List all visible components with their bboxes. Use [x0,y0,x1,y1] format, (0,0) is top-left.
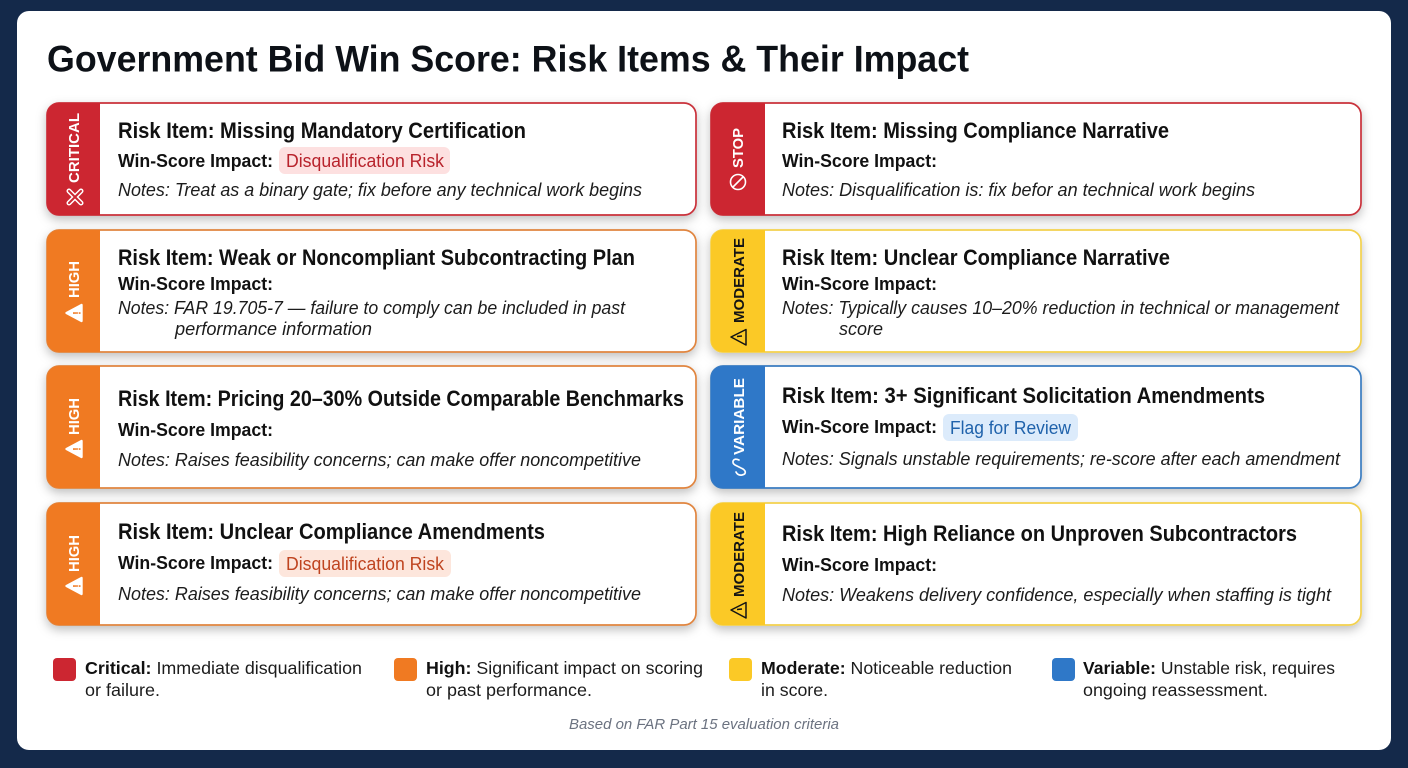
footnote: Based on FAR Part 15 evaluation criteria [569,717,839,733]
panel: moderate unclear compliance narrative [711,230,1361,352]
panel: moderate unproven subcontractors: Win-Score Impact: [782,555,937,575]
title: Government Bid Win Score: Risk Items & Their Impact [47,38,969,80]
panel: high unclear compliance amendments [47,503,696,625]
legend: moderate: Moderate: Noticeable reduction [761,658,1012,678]
panel: moderate unproven subcontractors: MODERATE [731,512,748,597]
panel: high pricing outside benchmarks [47,366,696,488]
panel: high unclear compliance amendments: Win-Score Impact: [118,553,273,573]
panel: high subcontracting plan [47,230,696,352]
panel: variable solicitation amendments [711,366,1361,488]
panel: stop missing compliance narrative [711,103,1361,215]
panel: moderate unproven subcontractors [711,503,1361,625]
legend: high: or past performance. [426,680,592,700]
panel: high pricing outside benchmarks: Risk Item: Pricing 20–30% Outside Comparable Benchmarks [118,386,684,411]
panel: high subcontracting plan: Win-Score Impact: [118,274,273,294]
panel: moderate unclear compliance narrative: MODERATE [731,238,748,323]
panel: variable solicitation amendments: Risk Item: 3+ Significant Solicitation Amendments [782,383,1265,408]
panel: high subcontracting plan: Notes: FAR 19.705-7 — failure to comply can be included in past [118,298,626,318]
legend: variable [1052,658,1335,700]
legend: high: High: Significant impact on scoring [426,658,703,678]
panel: variable solicitation amendments: Win-Score Impact: [782,417,937,437]
legend: moderate: in score. [761,680,828,700]
legend: moderate [729,658,1012,700]
panel: high unclear compliance amendments: ! [72,584,84,588]
panel: critical missing mandatory certification [47,103,696,215]
panel: critical missing mandatory certification: Risk Item: Missing Mandatory Certification [118,118,526,143]
panel: variable solicitation amendments: Notes: Signals unstable requirements; re-score after each amendment [782,449,1341,469]
panel: variable solicitation amendments: VARIABLE [731,378,748,455]
panel: moderate unproven subcontractors: Notes: Weakens delivery confidence, especially when staffing is tight [782,585,1332,605]
legend: variable: ongoing reassessment. [1083,680,1268,700]
panel: high pricing outside benchmarks: HIGH [66,398,83,435]
legend: high [394,658,703,700]
panel: high unclear compliance amendments: Disqualification Risk [286,554,445,574]
panel: stop missing compliance narrative: Win-Score Impact: [782,151,937,171]
panel: stop missing compliance narrative: STOP [730,128,747,168]
panel: high unclear compliance amendments: Risk Item: Unclear Compliance Amendments [118,519,545,544]
panel: high pricing outside benchmarks: ! [72,447,84,451]
panel: high pricing outside benchmarks: Notes: Raises feasibility concerns; can make offer noncompetitive [118,450,641,470]
panel: moderate unclear compliance narrative: Risk Item: Unclear Compliance Narrative [782,245,1170,270]
panel: high subcontracting plan: Risk Item: Weak or Noncompliant Subcontracting Plan [118,245,635,270]
panel: critical missing mandatory certification: Win-Score Impact: [118,151,273,171]
legend: critical: Critical: Immediate disqualification [85,658,362,678]
panel: variable solicitation amendments: Flag for Review [950,418,1072,438]
legend: variable: Variable: Unstable risk, requires [1083,658,1335,678]
panel: high pricing outside benchmarks: Win-Score Impact: [118,420,273,440]
legend: critical [53,658,362,700]
panel: critical missing mandatory certification: CRITICAL [66,113,83,183]
panel: moderate unclear compliance narrative: score [839,319,883,339]
panel: critical missing mandatory certification: Notes: Treat as a binary gate; fix before any technical work begins [118,180,642,200]
panel: high unclear compliance amendments: HIGH [66,535,83,572]
panel: high unclear compliance amendments: Notes: Raises feasibility concerns; can make offer noncompetitive [118,584,641,604]
panel: stop missing compliance narrative: Notes: Disqualification is: fix befor an technical work begins [782,180,1255,200]
panel: moderate unproven subcontractors: Risk Item: High Reliance on Unproven Subcontractors [782,521,1297,546]
panel: moderate unclear compliance narrative: Win-Score Impact: [782,274,937,294]
panel: high subcontracting plan: performance information [174,319,372,339]
panel: stop missing compliance narrative: Risk Item: Missing Compliance Narrative [782,118,1169,143]
panel: critical missing mandatory certification: Disqualification Risk [286,151,445,171]
legend: critical: or failure. [85,680,160,700]
panel: high subcontracting plan: HIGH [66,261,83,298]
panel: moderate unclear compliance narrative: Notes: Typically causes 10–20% reduction in technical or management [782,298,1340,318]
panel: high subcontracting plan: ! [72,311,84,315]
